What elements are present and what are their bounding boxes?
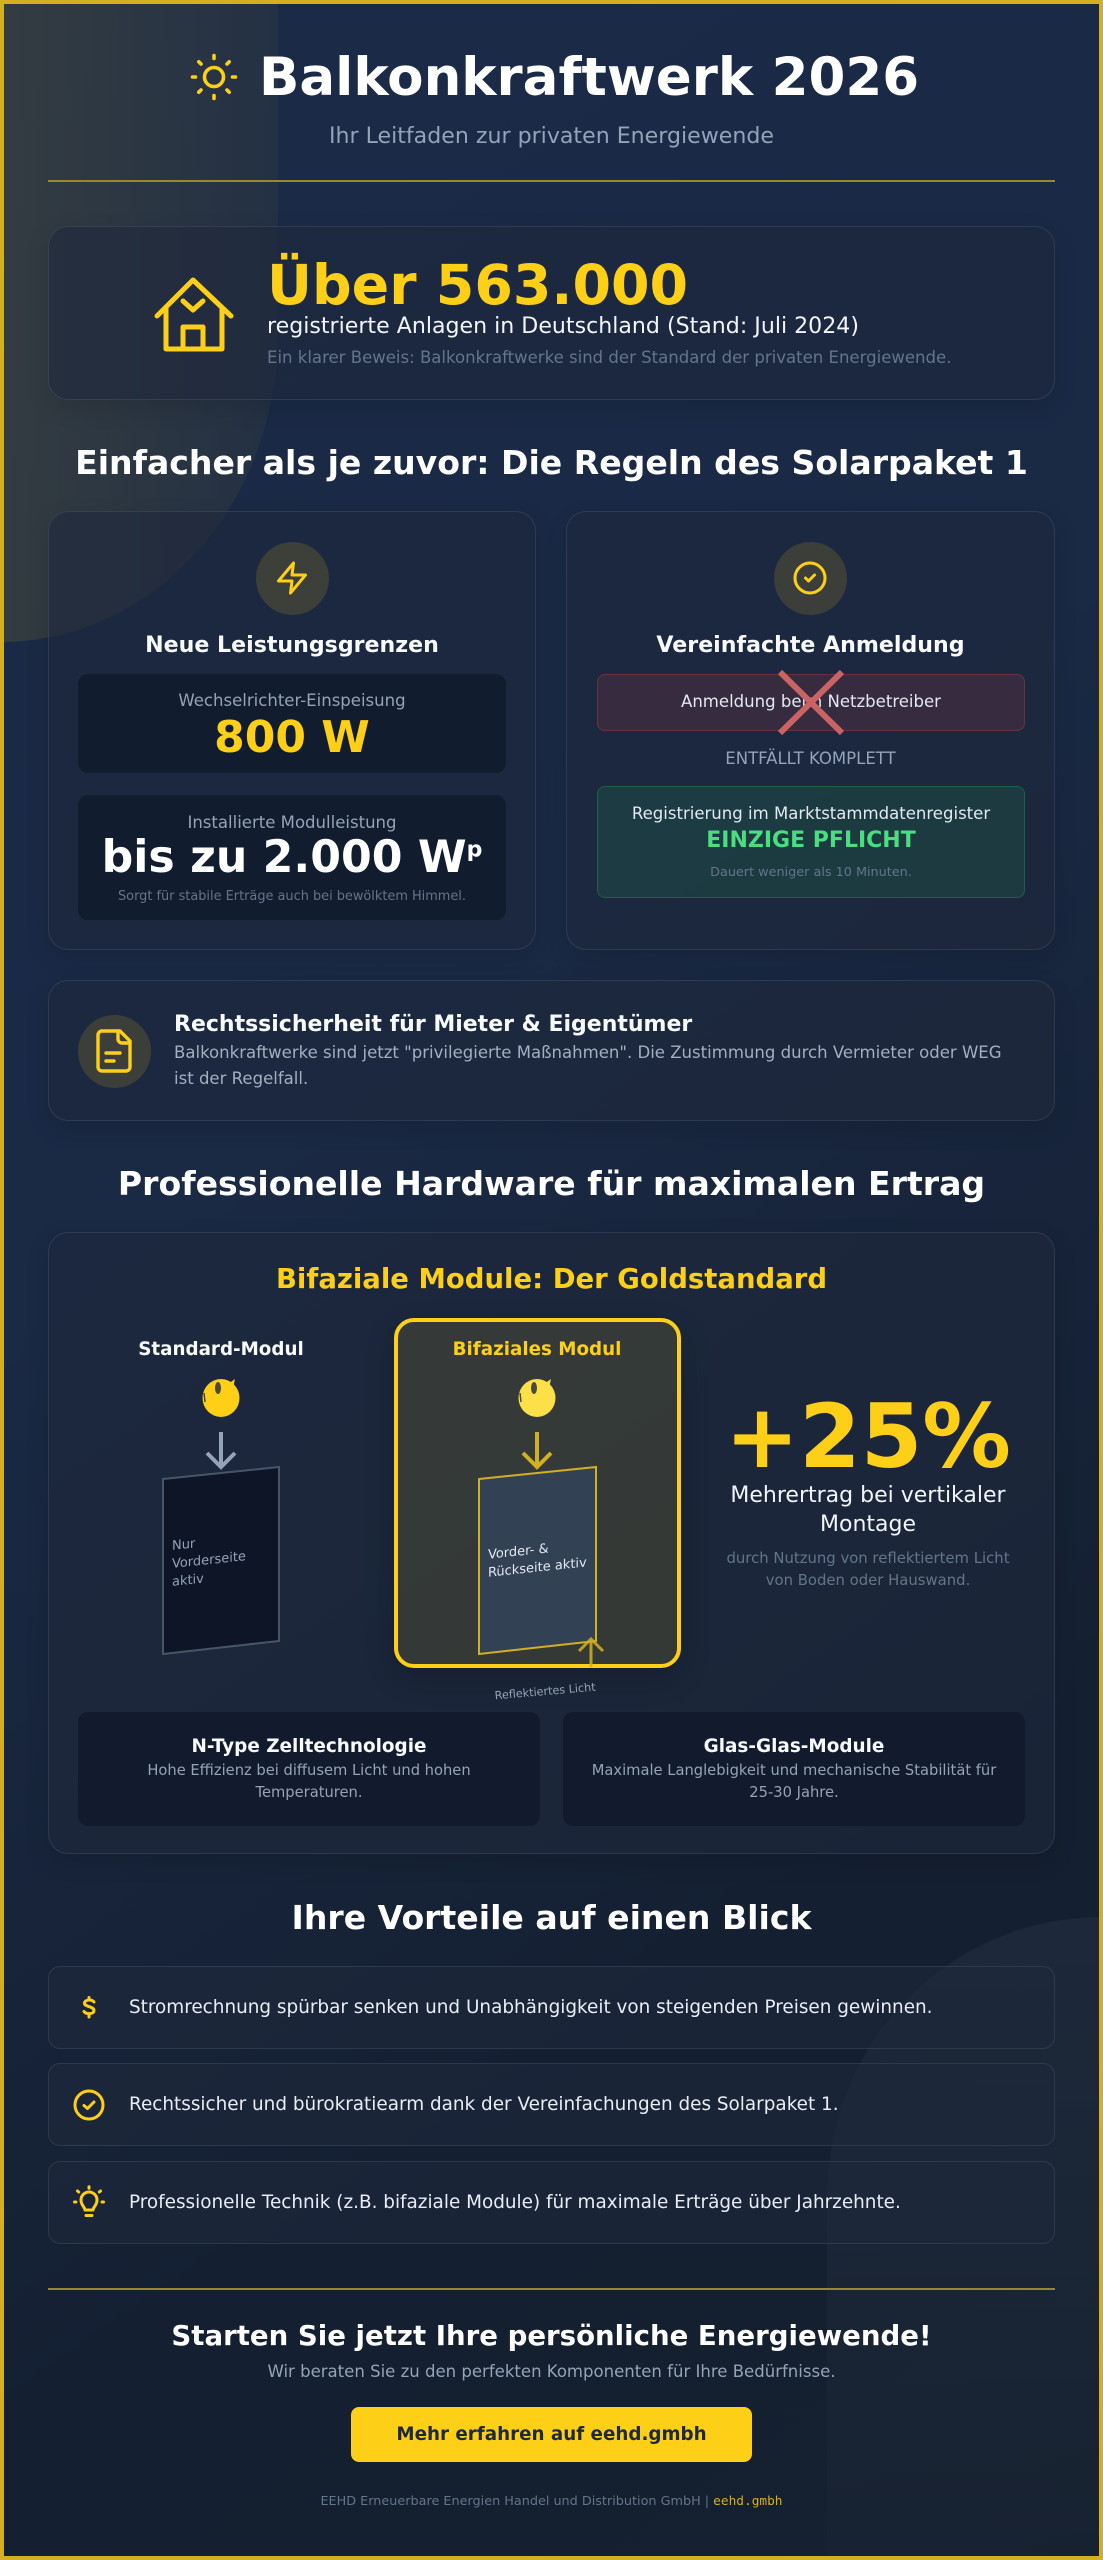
- feature text: Temperaturen.: [255, 1784, 362, 1801]
- step text: Anmeldung beim Netzbetreiber: [681, 692, 941, 711]
- benefit text: Professionelle Technik (z.B. bifaziale Module) für maximale Erträge über Jahrzehnte.: [129, 2192, 901, 2213]
- statistic note: [726, 1549, 1010, 1589]
- statistic note: durch Nutzung von reflektiertem Licht: [726, 1549, 1010, 1567]
- diagram: standard module: Vorderseite: [172, 1549, 246, 1572]
- feature text: Hohe Effizienz bei diffusem Licht und hohen: [147, 1762, 471, 1779]
- statistic caption: Montage: [820, 1512, 916, 1536]
- crossed-out step: [597, 674, 1025, 731]
- panel: simplified registration: [566, 511, 1055, 950]
- call to action text: Wir beraten Sie zu den perfekten Komponenten für Ihre Bedürfnisse.: [267, 2362, 836, 2381]
- feature text: 25-30 Jahre.: [749, 1784, 839, 1801]
- statistic note: Ein klarer Beweis: Balkonkraftwerke sind der Standard der privaten Energiewende.: [267, 348, 951, 367]
- benefit: savings: [48, 1966, 1055, 2049]
- icon: house: [154, 278, 234, 352]
- feature: N-Type: [78, 1712, 540, 1826]
- feature text: [592, 1762, 996, 1801]
- diagram: standard module: Nur: [172, 1536, 196, 1554]
- heading: benefits: Ihre Vorteile auf einen Blick: [292, 1898, 811, 1937]
- feature: glass-glass: [563, 1712, 1025, 1826]
- note: Dauert weniger als 10 Minuten.: [710, 865, 912, 880]
- diagram: bifacial module: Vorder- &: [488, 1541, 549, 1563]
- diagram: standard module: aktiv: [172, 1572, 204, 1590]
- label: Wechselrichter-Einspeisung: [178, 691, 406, 710]
- button: Mehr erfahren auf eehd.gmbh: [396, 2424, 707, 2445]
- feature text: [147, 1762, 471, 1801]
- heading: Rechtssicherheit für Mieter & Eigentümer: [174, 1012, 692, 1037]
- feature title: N-Type Zelltechnologie: [192, 1736, 426, 1757]
- icon: check: [74, 2090, 104, 2120]
- description: [174, 1043, 1002, 1088]
- panel: legal certainty: [48, 980, 1055, 1121]
- description: Balkonkraftwerke sind jetzt "privilegierte Maßnahmen". Die Zustimmung durch Vermieter oder WEG: [174, 1043, 1002, 1062]
- diagram: bifacial module: Reflektiertes Licht: [494, 1681, 597, 1702]
- statistic caption: Mehrertrag bei vertikaler: [730, 1483, 1006, 1508]
- module power: [78, 795, 506, 920]
- icon: check circle: [774, 542, 847, 615]
- panel: registered systems: [48, 226, 1055, 400]
- diagram: bifacial module: Bifaziales Modul: [453, 1339, 621, 1360]
- panel heading: Vereinfachte Anmeldung: [656, 632, 965, 658]
- heading: Solarpaket rules: Einfacher als je zuvor: Die Regeln des Solarpaket 1: [75, 443, 1028, 482]
- icon: dollar: [82, 1996, 96, 2018]
- benefit text: Rechtssicher und bürokratiearm dank der Vereinfachungen des Solarpaket 1.: [129, 2094, 839, 2115]
- heading: hardware: Professionelle Hardware für maximalen Ertrag: [118, 1164, 985, 1203]
- panel heading: Bifaziale Module: Der Goldstandard: [276, 1263, 827, 1295]
- panel heading: Neue Leistungsgrenzen: [145, 632, 439, 658]
- inverter feed-in: [78, 674, 506, 773]
- diagram: standard module: Standard-Modul: [138, 1339, 304, 1360]
- benefit text: Stromrechnung spürbar senken und Unabhängigkeit von steigenden Preisen gewinnen.: [129, 1997, 933, 2018]
- icon: lightning: [256, 542, 329, 615]
- status: ENTFÄLLT KOMPLETT: [725, 749, 896, 768]
- icon: sun: [190, 54, 238, 100]
- call to action heading: Starten Sie jetzt Ihre persönliche Energiewende!: [171, 2319, 932, 2352]
- panel: power limits: [48, 511, 536, 950]
- benefit: legal: [48, 2063, 1055, 2146]
- note: Sorgt für stabile Erträge auch bei bewölktem Himmel.: [118, 889, 466, 904]
- step text: Registrierung im Marktstammdatenregister: [632, 804, 990, 823]
- feature text: Maximale Langlebigkeit und mechanische Stabilität für: [592, 1762, 996, 1779]
- bifacial highlight box: [394, 1318, 681, 1668]
- statistic note: von Boden oder Hauswand.: [766, 1571, 970, 1589]
- button: [351, 2407, 752, 2462]
- subtitle: Ihr Leitfaden zur privaten Energiewende: [329, 123, 774, 149]
- cross mark: [778, 670, 844, 736]
- statistic: +25%: +25%: [725, 1385, 1011, 1488]
- statistic caption: registrierte Anlagen in Deutschland (Stand: Juli 2024): [267, 313, 859, 339]
- diagram: bifacial module: Rückseite aktiv: [488, 1555, 587, 1581]
- icon: lightbulb: [73, 2185, 105, 2217]
- panel: bifacial modules: [48, 1232, 1055, 1854]
- value: bis zu 2.000 Wp: [102, 832, 482, 883]
- label: Installierte Modulleistung: [187, 813, 397, 832]
- value: 800 W: [214, 712, 370, 763]
- icon: document: [78, 1015, 151, 1088]
- footer: EEHD Erneuerbare Energien Handel und Distribution GmbH | eehd.gmbh: [320, 2494, 783, 2509]
- benefit: technology: [48, 2161, 1055, 2244]
- description: ist der Regelfall.: [174, 1069, 308, 1088]
- statistic: Über 563.000: [267, 254, 688, 318]
- feature title: Glas-Glas-Module: [704, 1736, 884, 1757]
- required step: [597, 786, 1025, 898]
- title: Balkonkraftwerk 2026: [259, 47, 919, 108]
- statistic caption: [730, 1483, 1006, 1536]
- highlight: EINZIGE PFLICHT: [706, 828, 916, 853]
